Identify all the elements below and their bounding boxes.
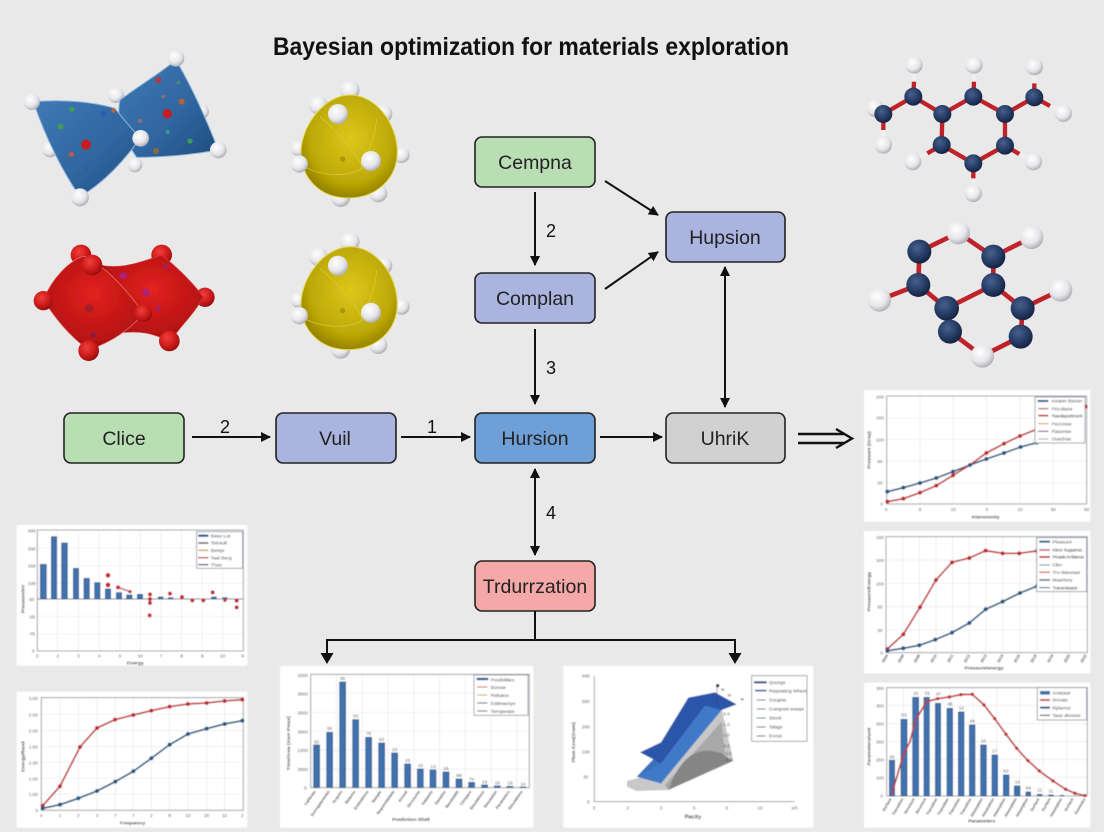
chart: saturation curves, right middle: 20 bbox=[877, 628, 883, 633]
chart: bars with scatter, left: 8 bbox=[241, 654, 244, 659]
chart: bars with bell curve, right bottom: 10 bbox=[981, 738, 986, 743]
chart: bars with bell curve, right bottom: Summary bbox=[1073, 796, 1087, 815]
chart: saturation curves, right middle: 2016 bbox=[1012, 653, 1022, 663]
arrow: Vuil to Hursion bbox=[401, 417, 470, 437]
chart: predicted bars, bottom centre: 3000 bbox=[297, 691, 308, 696]
chart: two saturation curves, left: 10 bbox=[185, 813, 191, 818]
chart: crossing curves, right top: Pricolaria bbox=[1052, 406, 1073, 412]
chart: bars with bell curve, right bottom: 73 bbox=[924, 691, 930, 696]
chart: bars with bell curve, right bottom: Transition bbox=[936, 796, 950, 816]
chart: saturation curves, right middle: 2006 bbox=[896, 653, 906, 663]
chart: two saturation curves, left: Energy/Rand bbox=[20, 741, 26, 772]
chart: bars with bell curve, right bottom: 44 bbox=[970, 718, 975, 723]
flowchart box: Cempna: Cempna bbox=[498, 152, 572, 174]
chart: predicted bars, bottom centre: 16 bbox=[443, 766, 449, 771]
chart: predicted bars, bottom centre: 52 bbox=[314, 739, 320, 744]
chart: 3D surface, bottom right: 0 bbox=[587, 799, 590, 804]
chart: bars with bell curve, right bottom: 45 bbox=[889, 754, 895, 759]
chart: predicted bars, bottom centre: Evaluations bbox=[353, 789, 370, 811]
chart: predicted bars, bottom centre: 2500 bbox=[297, 710, 308, 715]
chart: two saturation curves, left: 1 bbox=[59, 813, 62, 818]
chart: bars with bell curve, right bottom: Sricate bbox=[1052, 698, 1068, 704]
arrow: Hupsion and UhriK bbox=[724, 267, 726, 407]
chart: 3D surface, bottom right: 2 bbox=[626, 806, 629, 811]
chart: bars with bell curve, right bottom: 33 bbox=[913, 691, 919, 696]
chart: 3D surface, bottom right: Repeating Wheel bbox=[769, 689, 807, 695]
chart: predicted bars, bottom centre: 19 bbox=[418, 763, 423, 768]
chart: bars with scatter, left: Thee bbox=[211, 562, 222, 568]
chart: bars with bell curve, right bottom: 200 bbox=[876, 758, 884, 763]
chart: bars with bell curve, right bottom: Absorption bbox=[1014, 796, 1029, 818]
chart: crossing curves, right top: 50 bbox=[1051, 507, 1056, 512]
chart: 3D surface, bottom right: 1.0 bbox=[723, 733, 730, 738]
chart: two saturation curves, left: 7 bbox=[114, 813, 117, 818]
chart: two saturation curves, left: 7 bbox=[132, 813, 135, 818]
chart: bars with bell curve, right bottom: Transition bbox=[925, 796, 939, 816]
molecule: blue polyhedra bbox=[23, 50, 227, 206]
chart: bars with bell curve, right bottom: Transition bbox=[891, 796, 905, 816]
chart: predicted bars, bottom centre: Compare bbox=[458, 789, 473, 806]
molecule: yellow sphere top bbox=[291, 80, 410, 207]
chart: saturation curves, right middle: 2004 bbox=[880, 653, 890, 663]
chart: 3D surface, bottom right: w bbox=[741, 696, 745, 701]
chart: saturation curves, right middle: 0 bbox=[880, 650, 883, 655]
chart: 3D surface, bottom right: 0 bbox=[593, 806, 596, 811]
chart: bars with scatter, left: Taal Berg bbox=[211, 555, 232, 561]
chart: crossing curves, right top: 0 bbox=[985, 507, 988, 512]
chart: crossing curves, right top: Rasonse bbox=[1052, 429, 1072, 435]
chart: saturation curves, right middle: 100 bbox=[876, 558, 884, 563]
chart: bars with scatter, left: 2 bbox=[56, 654, 59, 659]
chart: 3D surface, bottom right: 5 bbox=[726, 806, 729, 811]
flowchart box: Trdurrzation bbox=[475, 561, 595, 611]
chart: bars with bell curve, right bottom: 200 bbox=[876, 722, 884, 727]
chart: bars with bell curve, right bottom: 63 bbox=[1003, 768, 1009, 773]
chart: bars with bell curve, right bottom: Parameters bbox=[968, 819, 995, 825]
chart: 3D surface, bottom right: Stock bbox=[769, 716, 782, 722]
flowchart box: Cempna bbox=[475, 137, 595, 187]
chart: crossing curves, right top: Pressure (Gray) bbox=[866, 431, 872, 469]
chart: two saturation curves, left: 1.40 bbox=[29, 760, 38, 765]
chart: bars with scatter, left: 0 bbox=[36, 654, 39, 659]
chart: 3D surface, bottom right: Quorge bbox=[769, 680, 786, 686]
chart: 3D surface, bottom right: 100 bbox=[582, 749, 590, 754]
chart: predicted bars, bottom centre: Simulations bbox=[507, 789, 524, 811]
chart: 3D surface, bottom right: 500 bbox=[582, 674, 590, 679]
chart: two saturation curves, left: 3.00 bbox=[29, 696, 38, 701]
chart: bars with bell curve, right bottom: Absorption bbox=[992, 796, 1007, 818]
chart: 3D surface, bottom right: Pacity bbox=[685, 815, 702, 821]
chart: 3D surface, bottom right: 3.0 bbox=[726, 758, 733, 763]
chart: bars with bell curve, right bottom: 53 bbox=[901, 713, 907, 718]
flowchart box: Vuil bbox=[276, 413, 396, 463]
chart: crossing curves, right top: 100 bbox=[876, 394, 884, 399]
chart: bars with bell curve, right bottom: 100 bbox=[876, 776, 884, 781]
chart: bars with bell curve, right bottom: Structure bbox=[914, 796, 928, 815]
chart: 3D surface, bottom right: 10 bbox=[757, 806, 763, 811]
chart: bars with bell curve, right bottom: 17 bbox=[992, 748, 998, 753]
chart: bars with scatter, left: Tetrault bbox=[211, 541, 228, 547]
chart: two saturation curves, left: 8 bbox=[168, 813, 171, 818]
chart: bars with scatter, left: 5 bbox=[119, 654, 122, 659]
chart: saturation curves, right middle: 2008 bbox=[912, 653, 922, 663]
chart: crossing curves, right top: 0 bbox=[880, 502, 883, 507]
chart: bars with bell curve, right bottom: Absorption bbox=[969, 796, 984, 818]
arrow: Complan to Hupsion bbox=[605, 252, 658, 289]
chart: bars with scatter, left: 50 bbox=[29, 597, 35, 602]
chart: predicted bars, bottom centre: 68 bbox=[456, 773, 462, 778]
chart: two saturation curves, left: 4 bbox=[40, 813, 43, 818]
flowchart box: Complan bbox=[475, 273, 595, 323]
chart: crossing curves, right top: Ravolaportment bbox=[1052, 413, 1083, 419]
chart: bars with bell curve, right bottom: Transition bbox=[959, 796, 973, 816]
chart: bars with bell curve, right bottom: 47 bbox=[936, 692, 941, 697]
chart: crossing curves, right top: Kearer Baxter bbox=[1052, 399, 1083, 405]
chart: saturation curves, right middle: 2012 bbox=[962, 653, 972, 663]
chart: bars with scatter, left: 3 bbox=[77, 654, 80, 659]
chart: bars with scatter, left bbox=[17, 525, 247, 667]
chart: bars with bell curve, right bottom: Transition bbox=[947, 796, 961, 816]
chart: predicted bars, bottom centre: Simulations bbox=[468, 789, 486, 811]
chart: bars with bell curve, right bottom: 46 bbox=[947, 702, 953, 707]
chart: bars with bell curve, right bottom: Tase dresset bbox=[1052, 713, 1081, 719]
chart: predicted bars, bottom centre: 2000 bbox=[297, 729, 308, 734]
chart: bars with bell curve, right bottom: Parameters/unit bbox=[866, 727, 872, 765]
chart: bars with scatter, left: 100 bbox=[28, 581, 36, 586]
chart: predicted bars, bottom centre: Datasets bbox=[420, 789, 434, 806]
flowchart box: Trdurrzation: Trdurrzation bbox=[483, 576, 587, 598]
chart: crossing curves, right top: 4 bbox=[885, 507, 888, 512]
chart: saturation curves, right middle: 2013 bbox=[979, 653, 988, 663]
arrow: Complan to Hursion: 3 bbox=[546, 358, 556, 378]
chart: predicted bars, bottom centre: Posibilities bbox=[491, 677, 515, 683]
chart: 3D surface, bottom right: 30 bbox=[583, 774, 589, 779]
chart: two saturation curves, left: 2.00 bbox=[29, 729, 38, 734]
chart: predicted bars, bottom centre bbox=[280, 666, 533, 828]
chart: predicted bars, bottom centre: Acquire bbox=[331, 789, 344, 804]
chart: predicted bars, bottom centre: Simulation bbox=[482, 789, 498, 809]
molecule: yellow sphere bottom bbox=[291, 232, 410, 359]
chart: crossing curves, right top: 50 bbox=[1084, 507, 1090, 512]
chart: crossing curves, right top: 8 bbox=[919, 507, 922, 512]
chart: two saturation curves, left: 2 bbox=[241, 813, 244, 818]
chart: 3D surface, bottom right: 3.0 bbox=[725, 751, 732, 756]
chart: 3D surface, bottom right: 0 bbox=[693, 806, 696, 811]
chart: predicted bars, bottom centre: 16 bbox=[495, 780, 500, 785]
flowchart box: Hupsion bbox=[666, 212, 785, 262]
chart: bars with bell curve, right bottom: 11 bbox=[1049, 788, 1054, 793]
chart: predicted bars, bottom centre: 14 bbox=[520, 782, 526, 787]
chart: crossing curves, right top: Peccisse bbox=[1052, 421, 1072, 427]
chart: bars with scatter, left: 7 bbox=[160, 654, 163, 659]
chart: saturation curves, right middle: 50 bbox=[877, 605, 883, 610]
chart: two saturation curves, left: 2 bbox=[150, 813, 153, 818]
chart: bars with bell curve, right bottom: Absorption bbox=[1003, 796, 1018, 818]
chart: predicted bars, bottom centre: 53 bbox=[379, 737, 385, 742]
chart: bars with bell curve, right bottom: Surface bbox=[1063, 796, 1075, 812]
chart: two saturation curves, left: 0 bbox=[35, 808, 38, 813]
chart: predicted bars, bottom centre: Anneal bbox=[397, 789, 408, 803]
chart: two saturation curves, left: 20 bbox=[204, 813, 210, 818]
chart: saturation curves, right middle: Kleur Suppress bbox=[1052, 548, 1083, 554]
chart: predicted bars, bottom centre: 0 bbox=[304, 785, 307, 790]
chart: crossing curves, right top bbox=[864, 390, 1090, 522]
chart: bars with scatter, left: Base Lot bbox=[211, 533, 231, 539]
chart: bars with scatter, left: 300 bbox=[28, 528, 36, 533]
chart: crossing curves, right top: Intensionity bbox=[972, 514, 1000, 520]
chart: bars with bell curve, right bottom: Absorption bbox=[1048, 796, 1063, 818]
chart: two saturation curves, left: 1.00 bbox=[29, 792, 38, 797]
chart: 3D surface, bottom right: 3 bbox=[660, 806, 663, 811]
chart: saturation curves, right middle: Pressure/Energy bbox=[866, 572, 872, 611]
arrow: Cempna to Complan: 2 bbox=[546, 221, 556, 241]
chart: predicted bars, bottom centre: Prediction Shell bbox=[392, 817, 430, 823]
chart: predicted bars, bottom centre: 16 bbox=[507, 780, 513, 785]
chart: bars with scatter, left: 10 bbox=[138, 654, 143, 659]
chart: predicted bars, bottom centre: 13 bbox=[430, 764, 436, 769]
chart: bars with bell curve, right bottom: Surface bbox=[881, 796, 893, 812]
chart: predicted bars, bottom centre: Sequentialdata bbox=[375, 789, 396, 815]
chart: two saturation curves, left bbox=[17, 692, 247, 828]
arrow: branching connector bbox=[320, 611, 742, 664]
chart: saturation curves, right middle: 2019 bbox=[1046, 653, 1055, 663]
chart: predicted bars, bottom centre: 7e bbox=[469, 776, 475, 781]
chart: predicted bars, bottom centre: 50 bbox=[327, 726, 333, 731]
chart: bars with bell curve, right bottom: Surface bbox=[1040, 796, 1052, 812]
flowchart box: Clice bbox=[64, 413, 184, 463]
arrow: Clice to Vuil: 2 bbox=[220, 417, 230, 437]
chart: two saturation curves, left: 11 bbox=[222, 813, 227, 818]
chart: 3D surface, bottom right: w bbox=[721, 687, 725, 692]
chart: saturation curves, right middle: Provide Ambience bbox=[1052, 555, 1085, 561]
chart: predicted bars, bottom centre: Samples bbox=[433, 789, 447, 806]
chart: two saturation curves, left: 1.00 bbox=[29, 776, 38, 781]
arrow: Hursion to UhriK bbox=[600, 436, 662, 438]
chart: bars with scatter, left: 10 bbox=[220, 654, 226, 659]
chart: 3D surface, bottom right: 200 bbox=[582, 724, 590, 729]
chart: bars with bell curve, right bottom: 0 bbox=[880, 794, 883, 799]
flowchart box: Hursion: Hursion bbox=[501, 428, 569, 450]
flowchart box: Vuil: Vuil bbox=[319, 428, 351, 450]
chart: 3D surface, bottom right: Tabge bbox=[769, 725, 783, 731]
molecule: ball and stick bottom bbox=[868, 221, 1072, 368]
chart: bars with scatter, left: 0 bbox=[32, 648, 35, 653]
chart: bars with bell curve, right bottom: 300 bbox=[876, 686, 884, 691]
chart: bars with bell curve, right bottom: 64 bbox=[1026, 786, 1031, 791]
chart: 3D surface, bottom right: Plum Exm(Gram) bbox=[571, 722, 577, 763]
chart: bars with bell curve, right bottom: 14 bbox=[1015, 779, 1020, 784]
chart: bars with bell curve, right bottom bbox=[864, 683, 1090, 828]
chart: bars with bell curve, right bottom: 12 bbox=[959, 706, 964, 711]
chart: bars with scatter, left: Pressure/eV bbox=[20, 584, 26, 613]
chart: predicted bars, bottom centre: Rebaice bbox=[491, 693, 509, 699]
chart: 3D surface, bottom right: 0.0 bbox=[723, 712, 730, 717]
chart: crossing curves, right top: 10 bbox=[951, 507, 956, 512]
arrow: Cempna to Complan bbox=[535, 192, 556, 265]
arrow: Hursion and Trdurrzation: 4 bbox=[546, 503, 556, 523]
chart: 3D surface, bottom right: 4.0 bbox=[723, 744, 730, 749]
chart: saturation curves, right middle: 150 bbox=[876, 581, 884, 586]
chart: predicted bars, bottom centre: 13 bbox=[392, 747, 398, 752]
chart: predicted bars, bottom centre: Estimaroye bbox=[491, 701, 516, 707]
chart: predicted bars, bottom centre: Boiose bbox=[491, 685, 506, 691]
chart: saturation curves, right middle: 2014 bbox=[996, 653, 1005, 663]
title: Bayesian optimization for materials exploration bbox=[273, 33, 789, 61]
chart: bars with bell curve, right bottom: Rplance bbox=[1052, 705, 1071, 711]
chart: bars with bell curve, right bottom: Anatase bbox=[1052, 690, 1071, 696]
chart: bars with scatter, left: 200 bbox=[28, 546, 36, 551]
chart: 3D surface, bottom right: 300 bbox=[582, 699, 590, 704]
chart: 3D surface, bottom right: 1.0 bbox=[723, 722, 730, 727]
chart: bars with bell curve, right bottom: Structure bbox=[903, 796, 916, 815]
chart: 3D surface, bottom right bbox=[563, 666, 813, 828]
chart: bars with bell curve, right bottom: 300 bbox=[876, 704, 884, 709]
arrow: double output arrow bbox=[798, 429, 852, 448]
chart: saturation curves, right middle: 2022 bbox=[1079, 653, 1088, 663]
chart: saturation curves, right middle: Tru Waveset bbox=[1052, 570, 1081, 576]
chart: predicted bars, bottom centre: 2000 bbox=[297, 767, 308, 772]
chart: saturation curves, right middle: Pleasure bbox=[1052, 539, 1072, 545]
chart: saturation curves, right middle: 100 bbox=[876, 535, 884, 540]
chart: predicted bars, bottom centre: Bandwidth bbox=[444, 789, 460, 809]
chart: crossing curves, right top: 150 bbox=[876, 416, 884, 421]
chart: predicted bars, bottom centre: 53 bbox=[353, 714, 359, 719]
chart: bars with scatter, left: Energy bbox=[127, 661, 144, 667]
chart: bars with scatter, left: 150 bbox=[28, 564, 36, 569]
chart: bars with scatter, left: -25 bbox=[28, 614, 35, 619]
chart: two saturation curves, left: Frequency bbox=[120, 820, 145, 826]
chart: predicted bars, bottom centre: Ternperate bbox=[491, 709, 515, 715]
chart: saturation curves, right middle: 2020 bbox=[1062, 653, 1072, 663]
chart: bars with scatter, left: 9 bbox=[201, 654, 204, 659]
chart: predicted bars, bottom centre: Balance bbox=[344, 789, 357, 805]
chart: predicted bars, bottom centre: 19 bbox=[482, 779, 488, 784]
flowchart box: UhriK bbox=[666, 413, 785, 463]
chart: predicted bars, bottom centre: Surrogatemodel bbox=[309, 789, 331, 817]
chart: two saturation curves, left: 1.80 bbox=[29, 745, 38, 750]
chart: predicted bars, bottom centre: Structures bbox=[406, 789, 422, 809]
chart: predicted bars, bottom centre: Calibrate bbox=[303, 789, 317, 806]
chart: 3D surface, bottom right: 1/0 bbox=[791, 806, 798, 811]
chart: predicted bars, bottom centre: Parameters bbox=[494, 789, 511, 810]
chart: crossing curves, right top: 10 bbox=[1017, 507, 1023, 512]
chart: bars with scatter, left: Betsje bbox=[211, 548, 225, 554]
chart: crossing curves, right top: 100 bbox=[876, 437, 884, 442]
chart: 3D surface, bottom right: Ennst bbox=[769, 734, 782, 740]
chart: 3D surface, bottom right: Compost teaspr bbox=[769, 707, 805, 713]
chart: predicted bars, bottom centre: Sample bbox=[370, 789, 383, 804]
arrow: Clice to Vuil bbox=[192, 417, 270, 437]
chart: crossing curves, right top: 20 bbox=[877, 481, 883, 486]
arrow: Cempna to Hupsion bbox=[605, 181, 658, 215]
chart: bars with bell curve, right bottom: 11 bbox=[1037, 788, 1042, 793]
chart: predicted bars, bottom centre: 55 bbox=[340, 676, 346, 681]
chart: bars with bell curve, right bottom: Surface bbox=[1029, 796, 1041, 812]
flowchart box: Hursion bbox=[475, 413, 595, 463]
chart: saturation curves, right middle: Transmission bbox=[1052, 585, 1078, 591]
flowchart box: Clice: Clice bbox=[102, 428, 146, 450]
chart: two saturation curves, left: 2.50 bbox=[29, 712, 38, 717]
chart: crossing curves, right top: 50 bbox=[877, 459, 883, 464]
chart: 3D surface, bottom right: Goupse bbox=[769, 698, 787, 704]
chart: two saturation curves, left: 3 bbox=[96, 813, 99, 818]
chart: crossing curves, right top: Duschas bbox=[1052, 437, 1072, 443]
chart: bars with scatter, left: 8 bbox=[180, 654, 183, 659]
arrow: Vuil to Hursion: 1 bbox=[427, 417, 437, 437]
chart: predicted bars, bottom centre: 76 bbox=[366, 731, 372, 736]
chart: predicted bars, bottom centre: 1200 bbox=[297, 748, 308, 753]
chart: predicted bars, bottom centre: 15 bbox=[405, 758, 411, 763]
flowchart box: Hupsion: Hupsion bbox=[689, 227, 761, 249]
chart: bars with bell curve, right bottom: Absorption bbox=[980, 796, 995, 818]
chart: saturation curves, right middle bbox=[864, 531, 1090, 673]
flowchart box: Complan: Complan bbox=[496, 288, 574, 310]
flowchart box: UhriK: UhriK bbox=[701, 428, 749, 450]
chart: saturation curves, right middle: Clim bbox=[1052, 563, 1062, 569]
chart: two saturation curves, left: 2 bbox=[77, 813, 80, 818]
chart: saturation curves, right middle: 2018 bbox=[1029, 653, 1038, 663]
chart: saturation curves, right middle: 2011 bbox=[946, 653, 955, 663]
chart: predicted bars, bottom centre: 3200 bbox=[297, 673, 308, 678]
molecule: ball and stick top bbox=[866, 56, 1072, 202]
chart: saturation curves, right middle: Noaritory bbox=[1052, 578, 1073, 584]
molecule: red polyhedra bbox=[34, 245, 215, 361]
chart: bars with scatter, left: -75 bbox=[28, 632, 35, 637]
chart: predicted bars, bottom centre: Time/Area (Asm Pmax) bbox=[286, 716, 292, 770]
arrow: Hursion and Trdurrzation bbox=[535, 469, 556, 555]
chart: bars with scatter, left: 4 bbox=[98, 654, 101, 659]
arrow: Complan to Hursion bbox=[535, 329, 556, 404]
chart: saturation curves, right middle: 2010 bbox=[929, 653, 938, 663]
chart: bars with bell curve, right bottom: 200 bbox=[876, 740, 884, 745]
chart: 3D surface, bottom right: w bbox=[728, 693, 732, 698]
chart: saturation curves, right middle: Pressure/energy bbox=[964, 665, 1004, 671]
